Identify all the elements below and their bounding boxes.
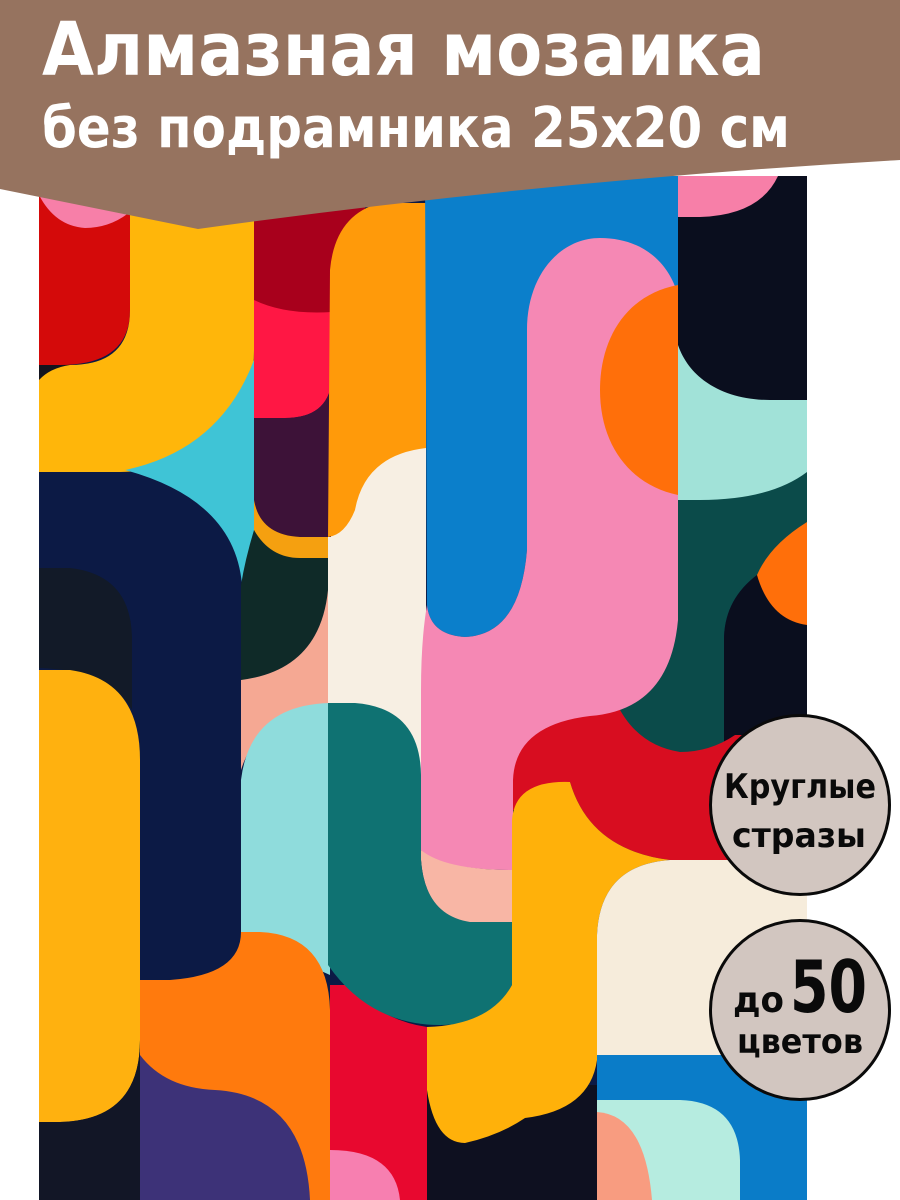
title: Алмазная мозаика (42, 7, 765, 93)
badge: up to 50 colours: 50 (790, 945, 867, 1029)
header banner (0, 0, 900, 229)
badge: round rhinestones (710, 716, 890, 894)
badge: up to 50 colours (710, 920, 890, 1100)
subtitle: без подрамника 25х20 см (42, 96, 790, 161)
badge: round rhinestones: стразы (732, 816, 866, 856)
badge: round rhinestones: Круглые (724, 767, 876, 807)
badge: up to 50 colours: цветов (737, 1022, 863, 1062)
badge: up to 50 colours: до (733, 980, 784, 1021)
panel: abstract artwork (39, 176, 807, 1200)
